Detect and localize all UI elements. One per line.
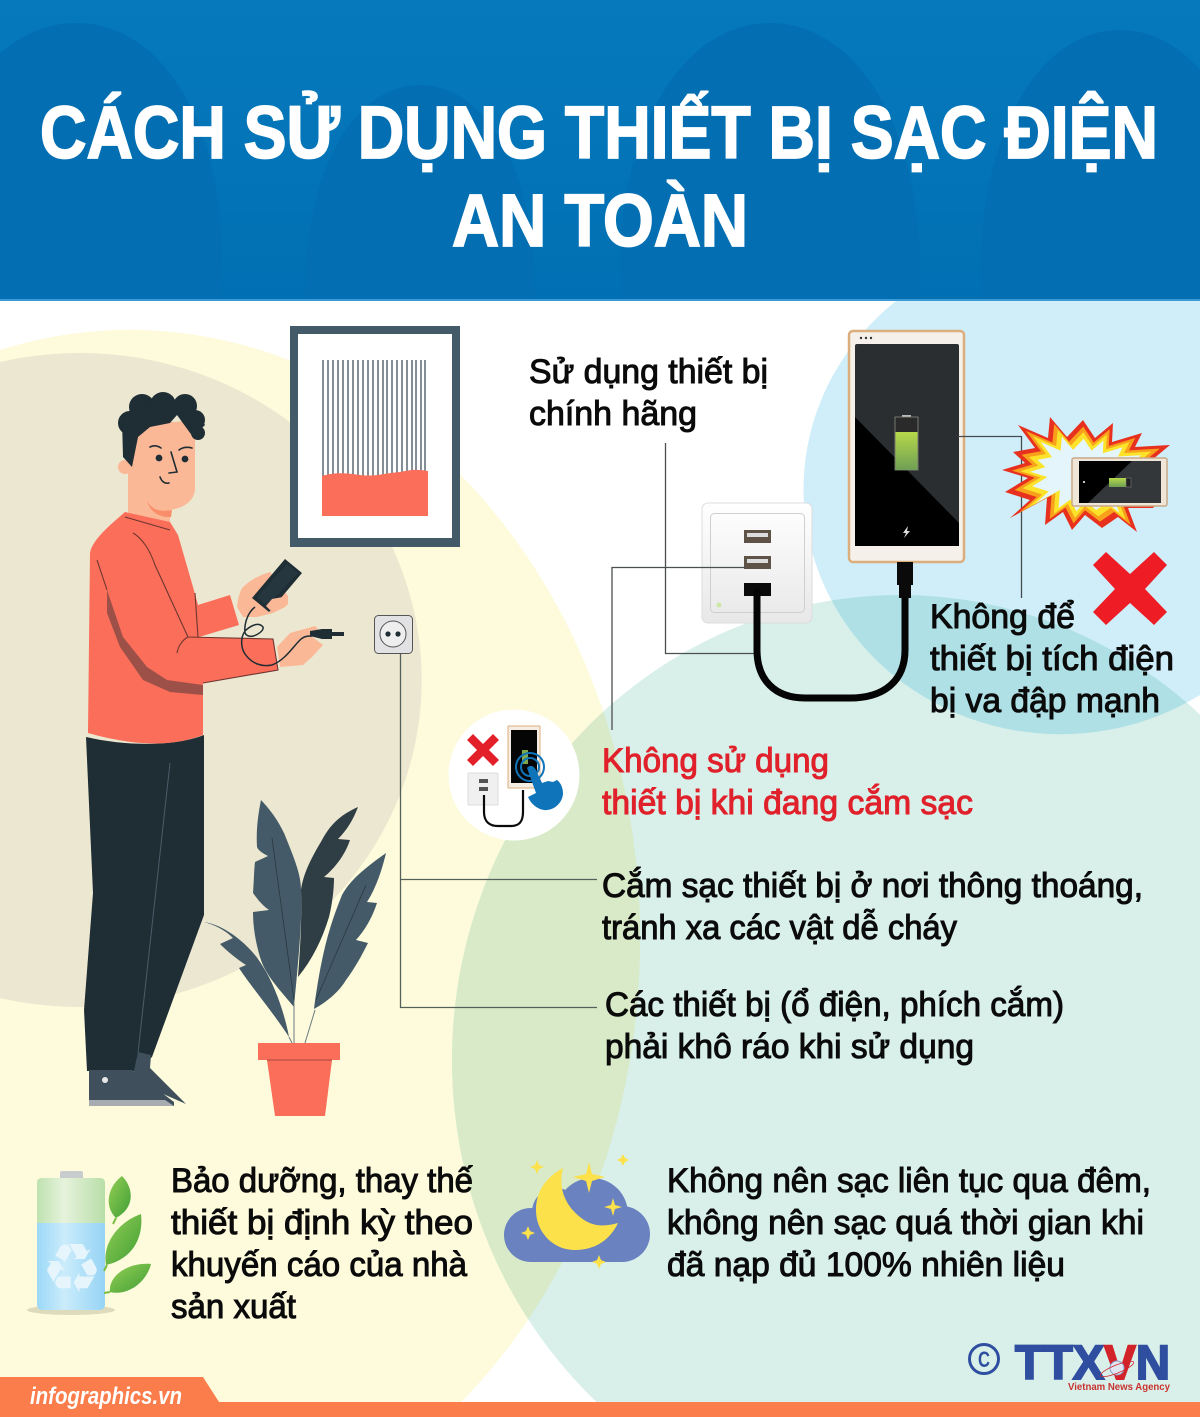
fingers over phone — [266, 596, 288, 610]
page background circles — [0, 301, 1200, 1417]
icon: eco battery: ♻ — [42, 1230, 102, 1309]
text: original devices: Sử dụng thiết bị — [529, 353, 768, 391]
text: ventilation: Cắm sạc thiết bị ở nơi thông thoáng, — [602, 867, 1143, 905]
text: maintenance: thiết bị định kỳ theo — [171, 1204, 473, 1242]
plant — [204, 800, 386, 1116]
wall outlet — [374, 616, 412, 654]
icon: explosion with phone — [1002, 417, 1170, 532]
phone in hand — [252, 559, 302, 612]
text: original devices — [529, 353, 768, 433]
icon: red cross — [1093, 552, 1167, 625]
text: keep dry — [605, 986, 1064, 1066]
icon: moon over cloud — [504, 1154, 650, 1269]
text: overnight charging: Không nên sạc liên tục qua đêm, — [667, 1162, 1151, 1200]
pot — [258, 1043, 340, 1116]
text: original devices: chính hãng — [529, 395, 697, 433]
text: maintenance: Bảo dưỡng, thay thế — [171, 1162, 473, 1200]
text: ventilation — [602, 867, 1143, 947]
title: AN TOÀN — [452, 179, 748, 262]
text: avoid impact: bị va đập mạnh — [930, 682, 1160, 720]
logo: TTXVN copyright: C — [978, 1347, 990, 1372]
connector lines from outlet — [400, 654, 597, 1008]
sweater — [88, 512, 278, 743]
text: maintenance: khuyến cáo của nhà — [171, 1246, 467, 1284]
icon: wall socket with usb ports — [702, 503, 812, 623]
head and neck — [128, 420, 195, 524]
connector line to explosion — [958, 436, 1022, 598]
plug — [310, 629, 344, 639]
connector lines to socket — [612, 443, 756, 730]
text: red warning: thiết bị khi đang cắm sạc — [602, 784, 973, 822]
hand with touch rings — [516, 753, 563, 810]
text: maintenance — [171, 1162, 473, 1326]
icon: do not touch while charging — [448, 710, 580, 840]
footer bar: infographics.vn — [30, 1383, 182, 1410]
face — [150, 446, 192, 483]
upper hand — [237, 572, 288, 617]
hair — [118, 392, 205, 467]
header band — [0, 0, 1200, 301]
text: red warning: Không sử dụng — [602, 742, 829, 780]
icon: smartphone charging — [849, 331, 964, 598]
text: keep dry: Các thiết bị (ổ điện, phích cắm) — [605, 986, 1064, 1024]
lower hand — [277, 626, 323, 667]
logo: TTXVN copyright: Vietnam News Agency — [1068, 1381, 1170, 1393]
text: maintenance: sản xuất — [171, 1288, 297, 1326]
man holding phone and charger — [84, 392, 344, 1106]
text: avoid impact: Không để — [930, 598, 1075, 636]
text: red warning — [602, 742, 973, 822]
mini red cross — [467, 734, 499, 766]
icon: eco battery — [27, 1171, 151, 1315]
text: overnight charging — [667, 1162, 1151, 1284]
logo: TTXVN copyright: TTXVN — [1015, 1337, 1170, 1390]
text: overnight charging: đã nạp đủ 100% nhiên liệu — [667, 1246, 1065, 1284]
shoes — [89, 1052, 186, 1106]
icon: charging cable — [757, 592, 905, 698]
leaves — [204, 800, 386, 1043]
text: avoid impact: thiết bị tích điện — [930, 640, 1174, 678]
footer bar — [0, 1377, 1200, 1417]
text: keep dry: phải khô ráo khi sử dụng — [605, 1028, 974, 1066]
charging cable — [242, 607, 312, 666]
phone connector — [897, 562, 913, 598]
text: ventilation: tránh xa các vật dễ cháy — [602, 909, 957, 947]
trousers — [84, 735, 204, 1071]
title — [40, 91, 1158, 262]
framed picture — [290, 326, 460, 547]
leaves — [105, 1176, 151, 1293]
text: overnight charging: không nên sạc quá thời gian khi — [667, 1204, 1144, 1242]
text: avoid impact — [930, 598, 1174, 720]
